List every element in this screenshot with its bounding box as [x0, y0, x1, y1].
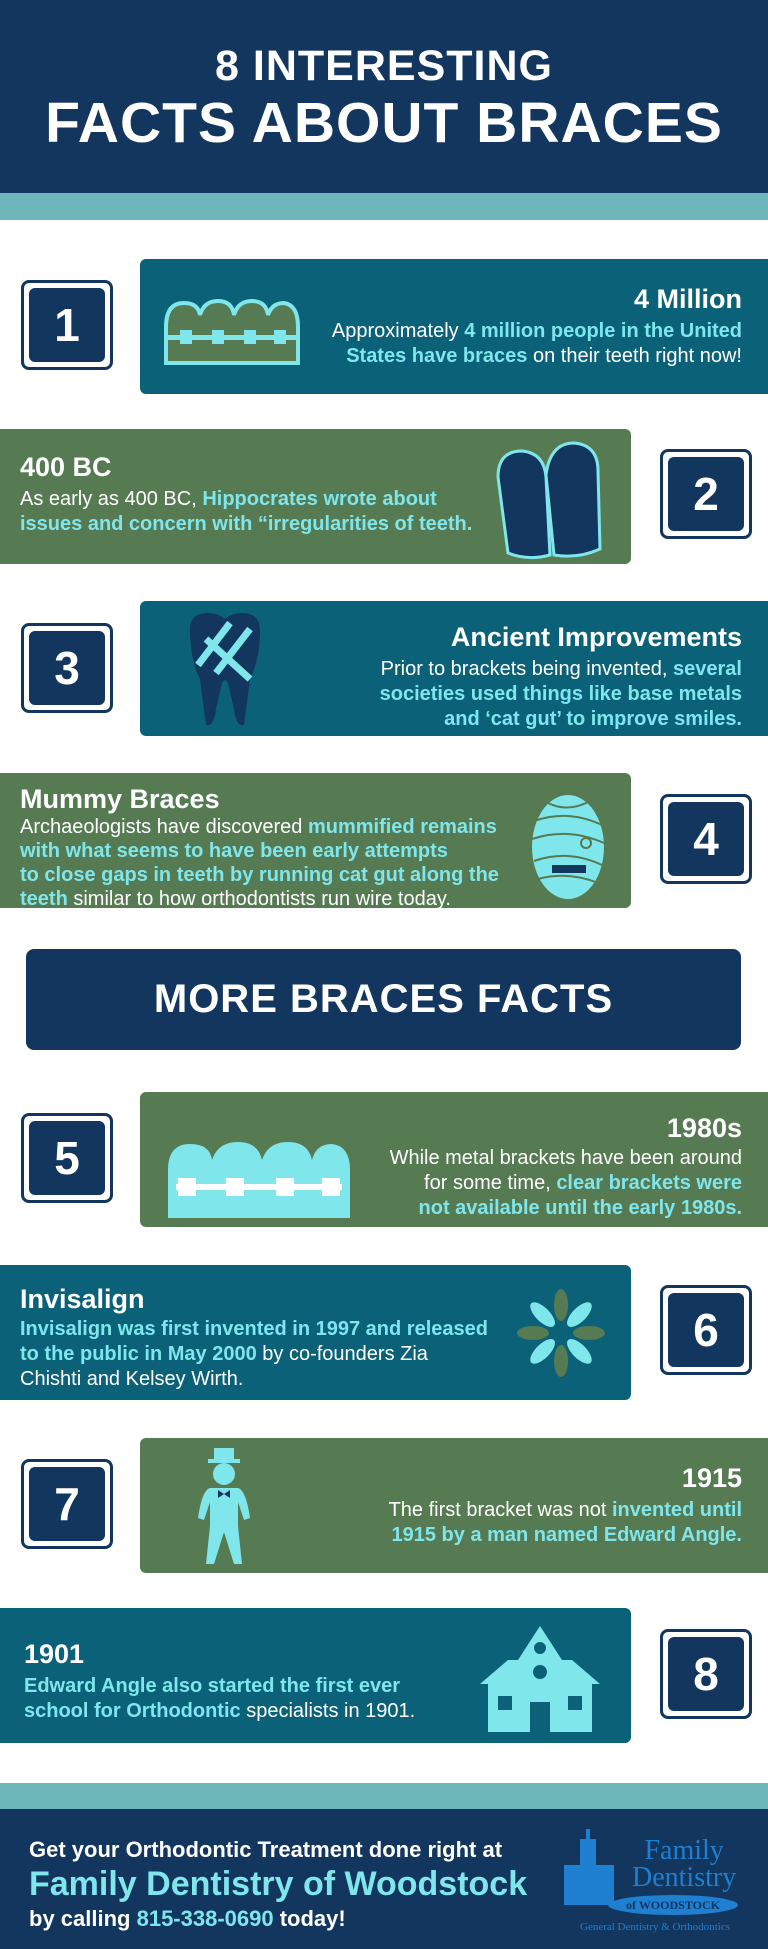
- text 1: 4 Million: [634, 284, 742, 314]
- panel 5: [140, 1092, 768, 1227]
- text 8: Edward Angle also started the first ever: [24, 1675, 400, 1697]
- logo: Dentistry: [632, 1862, 736, 1893]
- panel 6: [0, 1265, 631, 1400]
- text 7: 1915 by a man named Edward Angle.: [392, 1524, 742, 1546]
- text 7: The first bracket was not invented until: [389, 1499, 742, 1521]
- text 3: societies used things like base metals: [380, 683, 742, 705]
- text 1: States have braces on their teeth right now!: [346, 345, 742, 367]
- icon: tooth: [190, 613, 260, 726]
- logo: General Dentistry & Orthodontics: [580, 1921, 730, 1933]
- text 7: 1915: [682, 1463, 742, 1493]
- text 1: Approximately 4 million people in the United: [332, 320, 742, 342]
- number 7: [21, 1459, 113, 1549]
- footer text: by calling 815-338-0690 today!: [29, 1906, 346, 1931]
- number 3: 3: [54, 642, 80, 694]
- number 3: [21, 623, 113, 713]
- number 7: 7: [54, 1478, 80, 1530]
- text 3: and ‘cat gut’ to improve smiles.: [444, 708, 742, 730]
- icon: mummy: [532, 795, 604, 899]
- number 5: 5: [54, 1132, 80, 1184]
- text 6: [20, 1284, 488, 1390]
- icon: tablets: [496, 442, 602, 560]
- text 2: 400 BC: [20, 452, 112, 482]
- text 2: issues and concern with “irregularities of teeth.: [20, 513, 472, 535]
- text 5: 1980s: [667, 1113, 742, 1143]
- footer text: [29, 1837, 528, 1931]
- title line 2: FACTS ABOUT BRACES: [45, 91, 723, 155]
- footer text: Get your Orthodontic Treatment done right at: [29, 1837, 502, 1862]
- panel 3: [140, 601, 768, 736]
- footer text: Family Dentistry of Woodstock: [29, 1865, 527, 1903]
- number 1: [21, 280, 113, 370]
- number 1: 1: [54, 299, 80, 351]
- number 5: [21, 1113, 113, 1203]
- header: [0, 0, 768, 193]
- number 2: [660, 449, 752, 539]
- text 3: [380, 622, 742, 730]
- text 2: [20, 452, 472, 535]
- section heading: more braces facts: [26, 949, 741, 1050]
- icon: braces: [164, 299, 300, 365]
- text 5: [390, 1113, 742, 1219]
- icon: flower: [517, 1289, 605, 1377]
- number 8: 8: [693, 1648, 719, 1700]
- text 7: [389, 1463, 742, 1546]
- text 4: [20, 784, 499, 910]
- text 6: Invisalign was first invented in 1997 and released: [20, 1318, 488, 1340]
- text 5: not available until the early 1980s.: [419, 1197, 742, 1219]
- number 6: 6: [693, 1304, 719, 1356]
- text 6: Chishti and Kelsey Wirth.: [20, 1368, 243, 1390]
- text 3: Ancient Improvements: [451, 622, 742, 652]
- text 5: While metal brackets have been around: [390, 1147, 742, 1169]
- icon: school: [480, 1626, 600, 1732]
- logo: Family: [644, 1835, 724, 1866]
- panel 8: [0, 1608, 631, 1743]
- panel 7: [140, 1438, 768, 1573]
- panel 1: [140, 259, 768, 394]
- text 4: Mummy Braces: [20, 784, 220, 814]
- text 8: [24, 1639, 415, 1722]
- title line 1: 8 INTERESTING: [215, 42, 553, 90]
- logo: [564, 1829, 738, 1933]
- text 8: 1901: [24, 1639, 84, 1669]
- text 4: teeth similar to how orthodontists run wire today.: [20, 888, 451, 910]
- footer: [0, 1809, 768, 1949]
- text 1: [332, 284, 742, 367]
- panel 4: [0, 773, 631, 908]
- text 6: to the public in May 2000 by co-founders Zia: [20, 1343, 428, 1365]
- text 5: for some time, clear brackets were: [424, 1172, 742, 1194]
- number 4: 4: [693, 813, 719, 865]
- number 2: 2: [693, 468, 719, 520]
- icon: clear braces: [168, 1142, 350, 1218]
- panel 2: [0, 429, 631, 564]
- number 4: [660, 794, 752, 884]
- text 4: Archaeologists have discovered mummified remains: [20, 816, 497, 838]
- text 8: school for Orthodontic specialists in 1901.: [24, 1700, 415, 1722]
- icon: man: [198, 1448, 250, 1564]
- text 2: As early as 400 BC, Hippocrates wrote about: [20, 488, 437, 510]
- logo: of WOODSTOCK: [626, 1898, 720, 1912]
- text 3: Prior to brackets being invented, several: [381, 658, 742, 680]
- text 6: Invisalign: [20, 1284, 145, 1314]
- number 8: [660, 1629, 752, 1719]
- text 4: to close gaps in teeth by running cat gut along the: [20, 864, 499, 886]
- section heading: more braces facts: MORE BRACES FACTS: [154, 977, 613, 1021]
- number 6: [660, 1285, 752, 1375]
- text 4: with what seems to have been early attempts: [20, 840, 448, 862]
